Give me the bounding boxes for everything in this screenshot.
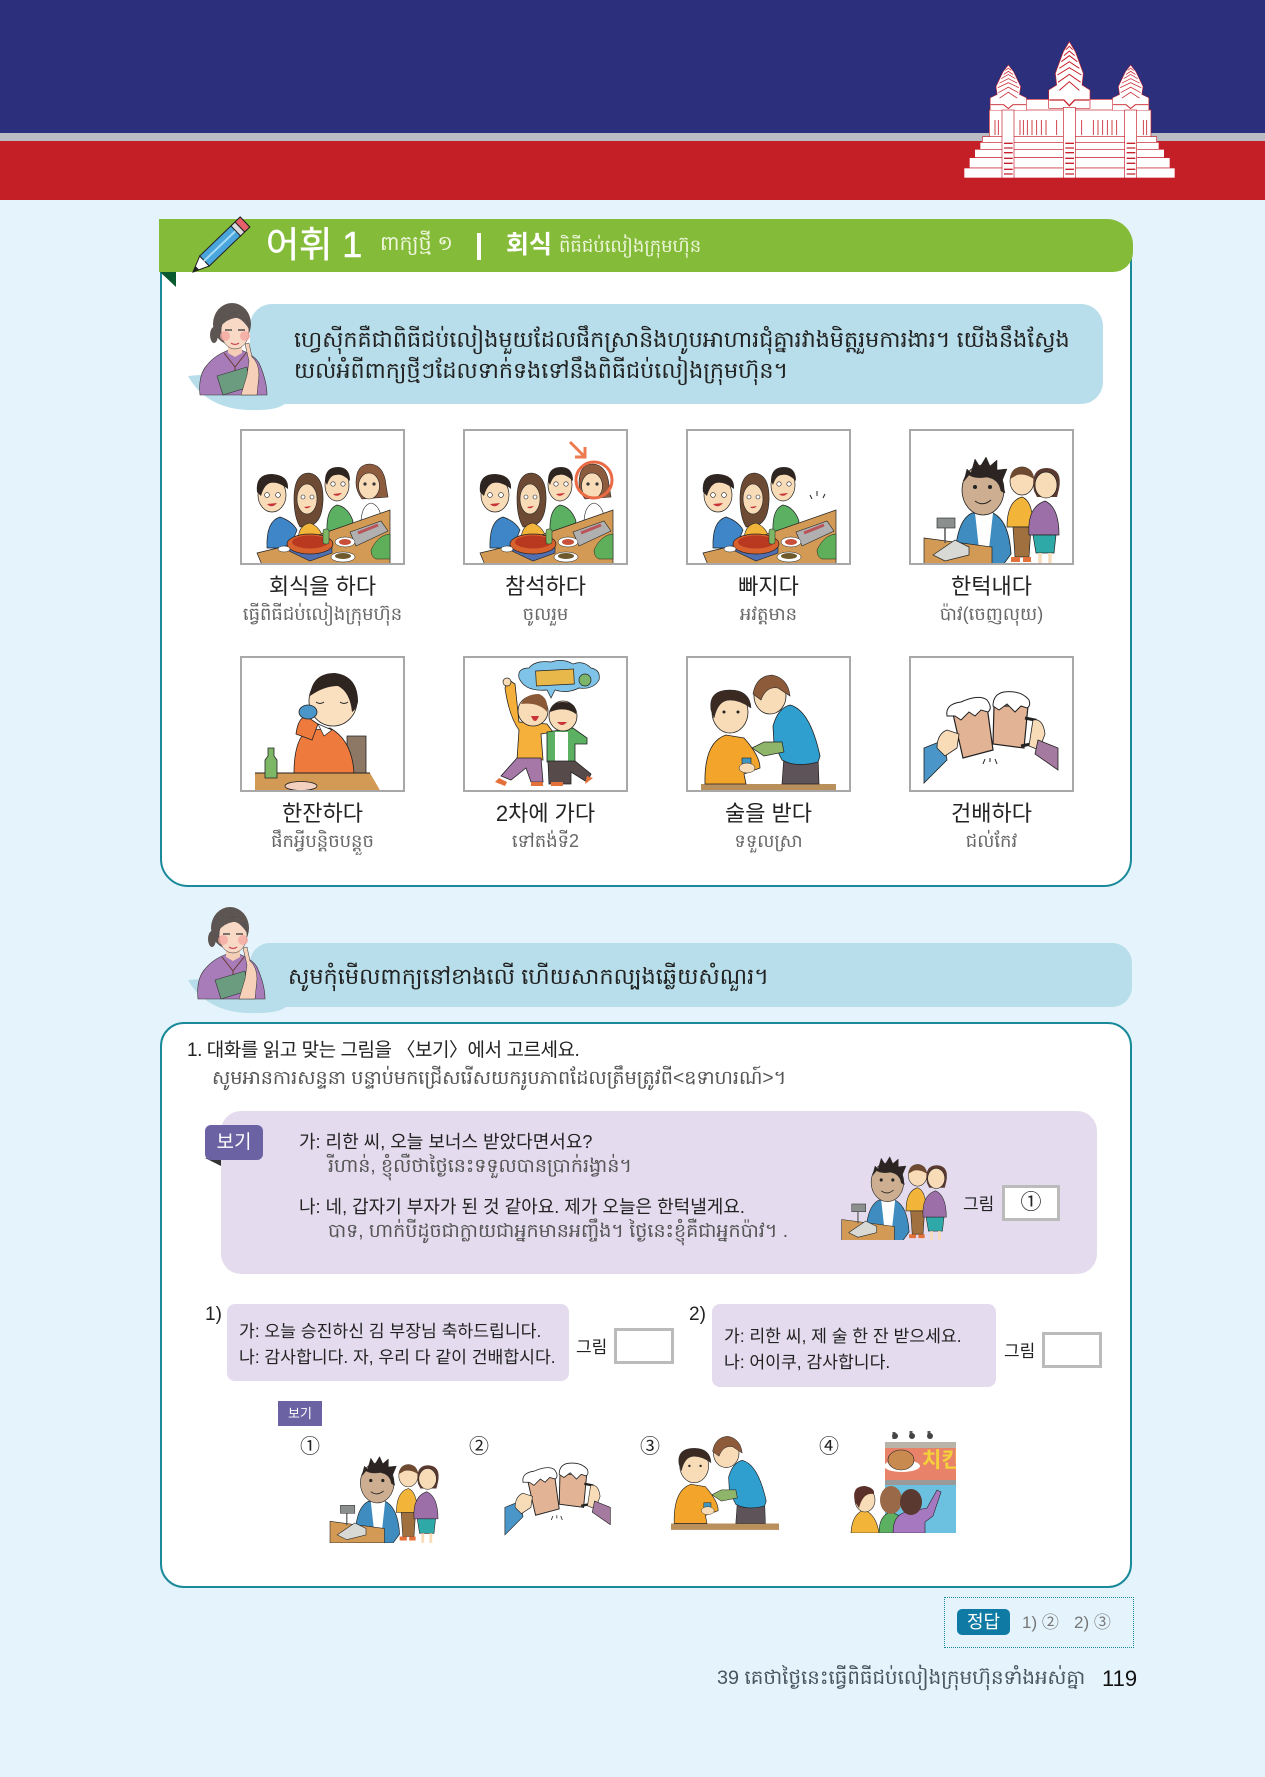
top banner: red band bbox=[0, 141, 1265, 200]
text: introduction bbox=[294, 325, 1070, 386]
tag corner bbox=[205, 1158, 221, 1166]
heading: Khmer vocabulary 1: ពាក្យថ្មី ១ bbox=[380, 232, 453, 255]
icon: teacher bbox=[199, 303, 268, 396]
example box bbox=[221, 1111, 1097, 1274]
card: 건배하다 bbox=[909, 656, 1074, 851]
label: Korean: 빠지다 bbox=[738, 574, 799, 599]
text: instruction: សូមកុំមើលពាក្យនៅខាងលើ ហើយសាកល្បងឆ្លើយសំណួរ។ bbox=[288, 964, 769, 989]
option 4 number: ④ bbox=[819, 1436, 839, 1458]
answer tag: 정답 bbox=[967, 1612, 1000, 1632]
label: Khmer: ចូលរួម bbox=[523, 604, 568, 624]
heading: Khmer company dinner: ពិធីជប់លៀងក្រុមហ៊ុន bbox=[559, 236, 701, 256]
illustration: toasting bbox=[909, 656, 1074, 792]
top banner: navy band bbox=[0, 0, 1265, 133]
answer 1: 1) ② bbox=[1022, 1613, 1059, 1632]
item 1 line A: 가: 오늘 승진하신 김 부장님 축하드립니다. bbox=[239, 1321, 541, 1341]
text: introduction: យល់អំពីពាក្យថ្មីៗដែលទាក់ទងទៅនឹងពិធីជប់លៀងក្រុមហ៊ុន។ bbox=[294, 358, 788, 383]
label: Korean: 2차에 가다 bbox=[496, 801, 595, 826]
tag: options: 보기 bbox=[288, 1406, 312, 1421]
option 2 number: ② bbox=[469, 1436, 489, 1458]
tag: example bbox=[205, 1125, 263, 1160]
label: Korean: 한턱내다 bbox=[951, 574, 1032, 599]
label: Khmer: ធ្វើពិធីជប់លៀងក្រុមហ៊ុន bbox=[243, 604, 402, 624]
label: Korean: 건배하다 bbox=[951, 801, 1032, 826]
card: 회식을 하다 bbox=[240, 429, 405, 626]
panel heading: green vocabulary bar bbox=[159, 219, 1133, 272]
option 4 illustration: chicken restaurant bbox=[850, 1431, 956, 1533]
speech bubble: instruction bbox=[250, 943, 1132, 1007]
label: Korean: 회식을 하다 bbox=[269, 574, 376, 599]
icon: header fold corner bbox=[160, 272, 176, 287]
illustration: going to second round bbox=[463, 656, 628, 792]
illustration: having a drink bbox=[240, 656, 405, 792]
tag: options bbox=[278, 1401, 322, 1426]
icon: pencil bbox=[192, 216, 250, 273]
question 1 Khmer: សូមអានការសន្ទនា បន្ទាប់មកជ្រើសរើសយករូបភាពដែលត្រឹមត្រូវពី<ឧទាហរណ៍>។ bbox=[212, 1068, 786, 1089]
card: 한턱내다 bbox=[909, 429, 1074, 626]
example line B Khmer: បាទ, ហាក់បីដូចជាក្លាយជាអ្នកមានអញ្ចឹង។ ថ្ងៃនេះខ្ញុំគឺជាអ្នកប៉ាវ។ . bbox=[328, 1221, 788, 1242]
label: Korean: 참석하다 bbox=[505, 574, 586, 599]
label: Khmer: ផឹកអ្វីបន្តិចបន្តួច bbox=[271, 831, 374, 851]
item 1 picture label: 그림 bbox=[576, 1338, 607, 1357]
illustration: paying the bill bbox=[909, 429, 1074, 565]
option 1 illustration bbox=[330, 1456, 439, 1543]
answer tag bbox=[957, 1609, 1010, 1635]
example line A Khmer: រីហាន់, ខ្ញុំលឺថាថ្ងៃនេះទទួលបានប្រាក់រង្វាន់។ bbox=[328, 1156, 632, 1177]
illustration: receiving a drink bbox=[686, 656, 851, 792]
option 3 number: ③ bbox=[640, 1436, 660, 1458]
option 3 illustration bbox=[671, 1436, 779, 1530]
item 2 line A: 가: 리한 씨, 제 술 한 잔 받으세요. bbox=[724, 1326, 962, 1346]
panel: vocabulary bbox=[160, 230, 1132, 887]
heading: vocabulary 1: 어휘 1 bbox=[266, 224, 362, 265]
illustration: company dinner bbox=[240, 429, 405, 565]
label: Korean: 한잔하다 bbox=[282, 801, 363, 826]
option 2 illustration bbox=[504, 1462, 611, 1536]
card: 한잔하다 bbox=[240, 656, 405, 855]
answer 2: 2) ③ bbox=[1074, 1613, 1111, 1632]
tag: example: 보기 bbox=[217, 1132, 251, 1153]
label: Korean: 술을 받다 bbox=[725, 801, 812, 826]
item 1 line B: 나: 감사합니다. 자, 우리 다 같이 건배합시다. bbox=[239, 1347, 556, 1367]
example answer box: ① bbox=[1020, 1191, 1042, 1214]
example line A Korean: 가: 리한 씨, 오늘 보너스 받았다면서요? bbox=[299, 1132, 592, 1152]
footer title: 39 គេថាថ្ងៃនេះធ្វើពិធីជប់លៀងក្រុមហ៊ុនទាំងអស់គ្នា bbox=[717, 1667, 1085, 1689]
item 2 answer box bbox=[1042, 1332, 1102, 1368]
item 2 line B: 나: 어이쿠, 감사합니다. bbox=[724, 1352, 890, 1372]
card: 참석하다 bbox=[463, 429, 628, 626]
card: 빠지다 bbox=[686, 429, 851, 624]
answer box bbox=[944, 1597, 1134, 1648]
card: 2차에 가다 bbox=[463, 656, 628, 851]
label: Khmer: ប៉ាវ(ចេញលុយ) bbox=[940, 604, 1043, 624]
item 2 number: 2) bbox=[689, 1304, 706, 1325]
question 1 Korean: 1. 대화를 읽고 맞는 그림을 〈보기〉에서 고르세요. bbox=[187, 1040, 579, 1061]
icon: bubble swoosh 2 bbox=[188, 979, 286, 1014]
item 1 number: 1) bbox=[205, 1304, 222, 1325]
speech bubble: introduction bbox=[250, 304, 1103, 404]
icon: teacher 2 bbox=[197, 907, 266, 1000]
text: introduction: ហ្វេស៊ីកគឺជាពិធីជប់លៀងមួយដែលផឹកស្រានិងហូបអាហារជុំគ្នារវាងមិត្តរួមការងារ។ យើងនឹងស្វែង bbox=[294, 327, 1070, 352]
label: Khmer: អវត្តមាន bbox=[740, 604, 797, 624]
label: Khmer: ជល់កែវ bbox=[966, 831, 1017, 851]
item 2 picture label: 그림 bbox=[1004, 1342, 1035, 1361]
option 1 number: ① bbox=[300, 1436, 320, 1458]
example answer box bbox=[1002, 1185, 1060, 1221]
illustration: absent bbox=[686, 429, 851, 565]
example picture label: 그림 bbox=[963, 1195, 994, 1214]
top banner: grey stripe bbox=[0, 133, 1265, 141]
illustration: attending bbox=[463, 429, 628, 565]
example illustration bbox=[841, 1156, 947, 1240]
icon: Angkor Wat temple bbox=[964, 41, 1175, 178]
icon: bubble swoosh bbox=[188, 374, 284, 410]
page number: 119 bbox=[1102, 1666, 1137, 1691]
card: 술을 받다 bbox=[686, 656, 851, 853]
example line B Korean: 나: 네, 갑자기 부자가 된 것 같아요. 제가 오늘은 한턱낼게요. bbox=[299, 1197, 745, 1217]
panel: exercise bbox=[160, 1022, 1132, 1588]
heading: company dinner: 회식 bbox=[506, 231, 552, 259]
item 1 answer box bbox=[614, 1328, 674, 1364]
label: Khmer: ទៅតង់ទី2 bbox=[512, 831, 579, 851]
item 2 dialogue box bbox=[712, 1304, 996, 1387]
item 1 dialogue box bbox=[227, 1304, 569, 1381]
label: Khmer: ទទួលស្រា bbox=[734, 831, 803, 851]
divider bar bbox=[477, 233, 481, 260]
